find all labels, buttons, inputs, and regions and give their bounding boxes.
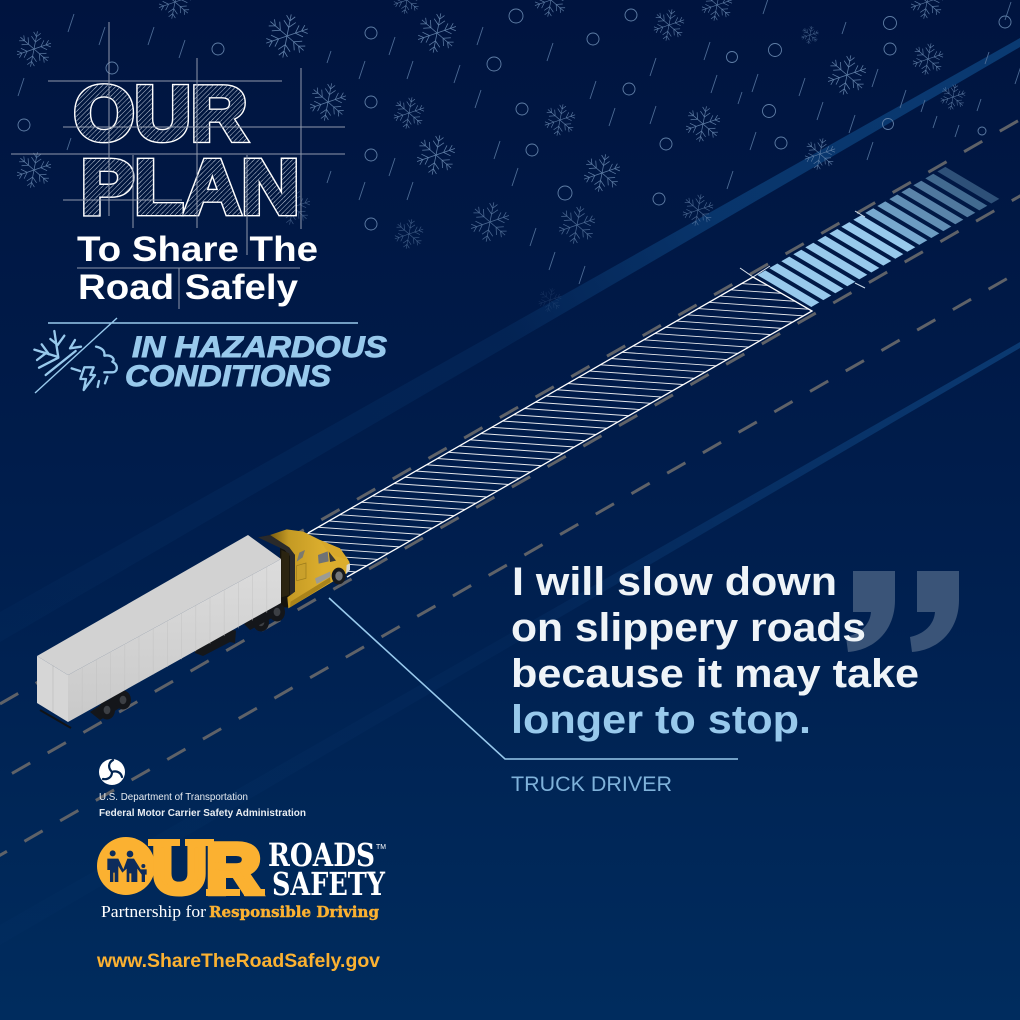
logo wordmark bbox=[268, 837, 386, 903]
title: OUR PLAN: PLAN bbox=[81, 144, 299, 230]
icon: quotation mark bbox=[846, 571, 959, 652]
logo: Our Roads Our Safety bbox=[97, 830, 386, 921]
logo wordmark: TM bbox=[376, 844, 386, 851]
logo wordmark: ROADS bbox=[268, 837, 375, 874]
title backing outline bbox=[74, 71, 299, 230]
quote text: because it may take bbox=[511, 652, 919, 696]
callout leader line bbox=[329, 598, 738, 759]
quote text: I will slow down bbox=[512, 560, 837, 604]
crosswalk-like stopping bars bbox=[757, 167, 999, 307]
road lane dashes bbox=[0, 121, 1020, 861]
hazard divider and slash bbox=[35, 318, 358, 393]
subtitle: Road Safely bbox=[78, 267, 298, 307]
logo tagline: Responsible Driving bbox=[209, 904, 379, 921]
stopping distance hatched zone bbox=[306, 266, 814, 578]
rear bumper bbox=[40, 710, 71, 728]
snowflakes bbox=[15, 0, 966, 312]
tractor drive wheels bbox=[244, 602, 285, 632]
rain streaks bbox=[18, 0, 1020, 284]
road edge band upper bbox=[0, 38, 1020, 642]
attribution: TRUCK DRIVER bbox=[511, 772, 672, 796]
trailer rear bbox=[37, 656, 68, 722]
logo UR: UR bbox=[152, 830, 260, 908]
quote text: on slippery roads bbox=[511, 606, 866, 650]
trailer side bbox=[68, 559, 281, 722]
title backing outline: OUR bbox=[74, 71, 247, 157]
logo tagline: Partnership for bbox=[101, 902, 206, 921]
subtitle: To Share The bbox=[77, 229, 318, 269]
trailer ribs bbox=[82, 567, 267, 713]
trailer wheels bbox=[90, 690, 131, 720]
logo wordmark: SAFETY bbox=[272, 866, 385, 903]
agency text bbox=[99, 792, 306, 819]
icon: half snowflake and storm cloud bbox=[34, 331, 117, 390]
truck bbox=[37, 529, 350, 728]
front wheel bbox=[332, 568, 346, 584]
agency text: Federal Motor Carrier Safety Administration bbox=[99, 808, 306, 819]
icon: DOT logo bbox=[99, 759, 125, 785]
logo tagline bbox=[101, 902, 379, 921]
title backing outline: PLAN bbox=[81, 144, 299, 230]
road edge band lower bbox=[0, 342, 1020, 945]
blueprint construction lines bbox=[11, 22, 345, 309]
title: OUR PLAN: OUR bbox=[74, 71, 247, 157]
title backing outline: PLAN bbox=[81, 144, 299, 230]
heading: in hazardous conditions bbox=[125, 331, 387, 393]
trailer top bbox=[37, 535, 281, 675]
snow circles bbox=[18, 9, 1011, 230]
quote text: longer to stop. bbox=[511, 698, 811, 742]
logo circle with family bbox=[97, 837, 155, 895]
landing gear bbox=[195, 630, 236, 656]
title backing outline: OUR bbox=[74, 71, 247, 157]
heading: in hazardous conditions: IN HAZARDOUS bbox=[132, 331, 387, 364]
website url: www.ShareTheRoadSafely.gov bbox=[96, 951, 380, 972]
tractor cab bbox=[258, 529, 350, 608]
subtitle bbox=[77, 229, 318, 307]
title: OUR PLAN bbox=[74, 71, 299, 230]
agency text: U.S. Department of Transportation bbox=[99, 792, 248, 803]
quote text bbox=[511, 560, 919, 742]
heading: in hazardous conditions: CONDITIONS bbox=[125, 360, 331, 393]
